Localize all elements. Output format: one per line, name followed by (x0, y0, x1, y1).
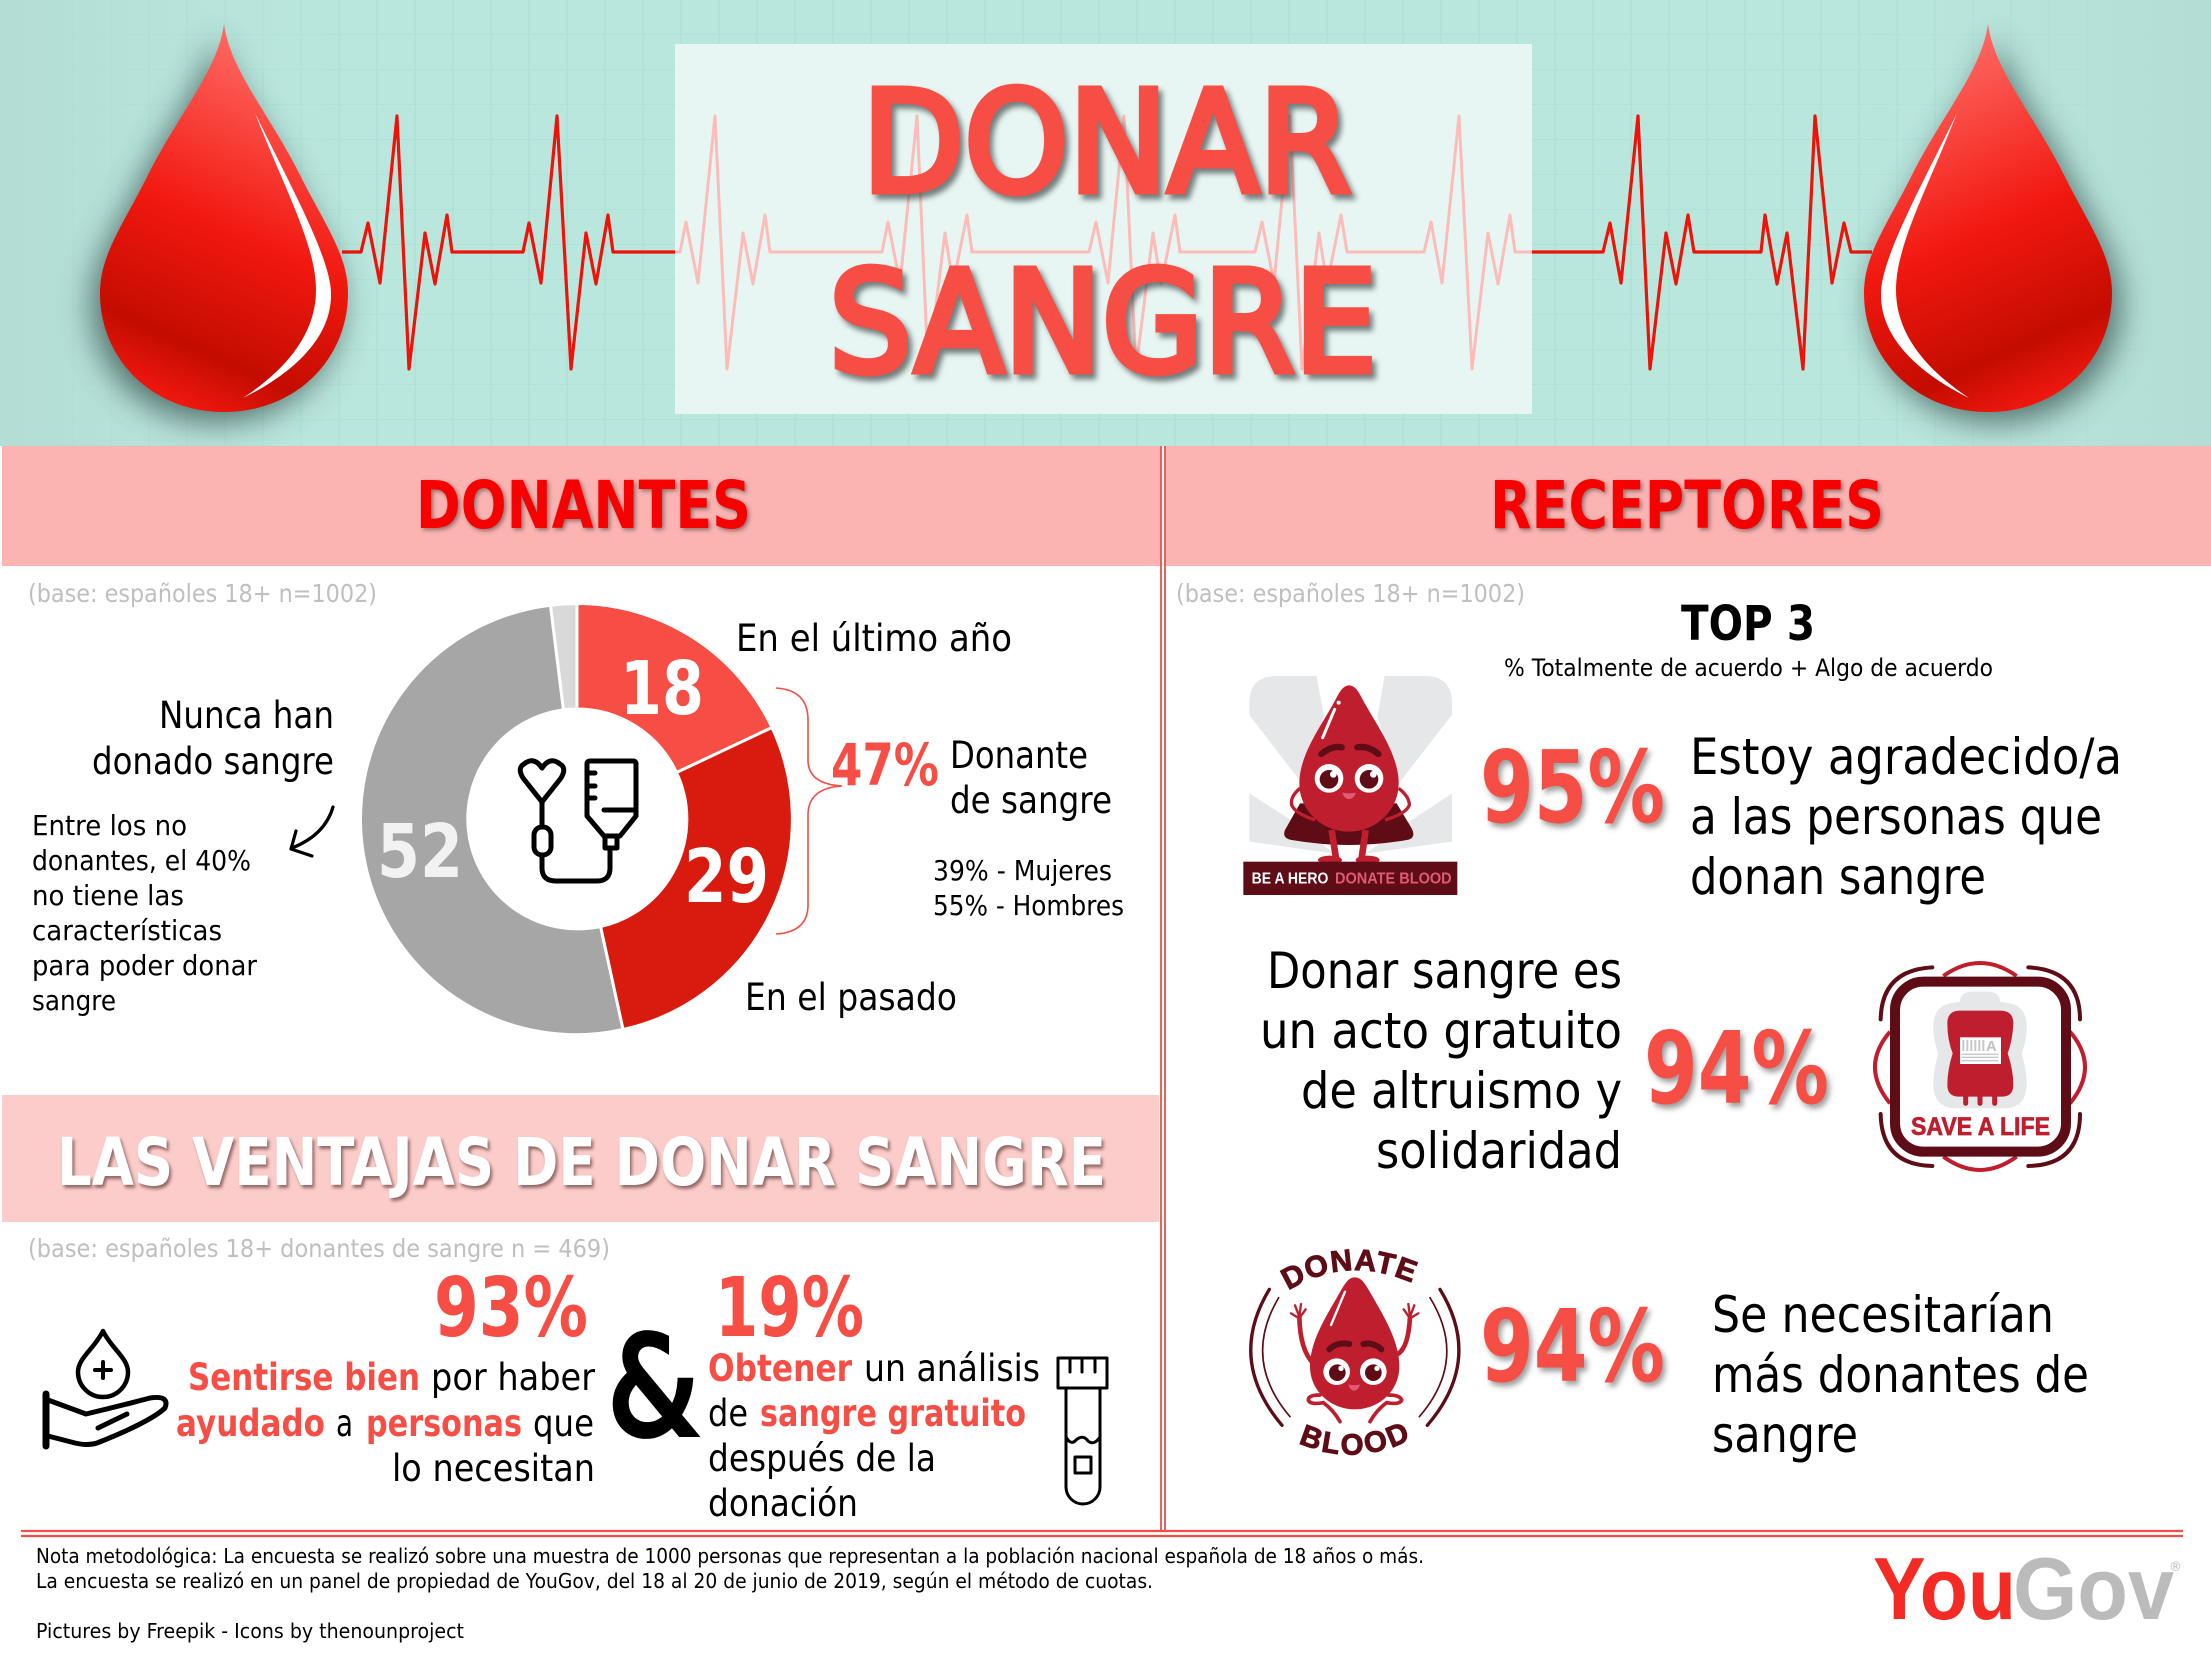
ECG line inside title box (675, 116, 1532, 369)
icon: donate blood (1249, 1249, 1461, 1456)
logo: YouGov: Gov (2013, 1539, 2174, 1638)
base note donantes: (base: españoles 18+ n=1002) (28, 579, 377, 608)
ECG line left (342, 116, 675, 369)
text: obtener analisis: un análisis (864, 1347, 1040, 1390)
section band: RECEPTORES: RECEPTORES (1490, 467, 1884, 544)
donut chart (361, 604, 792, 1035)
text: split by gender: 39% - Mujeres (933, 854, 1112, 887)
stat: 94% acto: 94% (1644, 1010, 1829, 1127)
brace (776, 688, 842, 934)
icon: donate blood: DONATE (1280, 1249, 1418, 1290)
icon: hand with drop (46, 1331, 166, 1446)
section band: DONANTES (2, 446, 1161, 566)
base note receptores: (base: españoles 18+ n=1002) (1176, 579, 1525, 608)
text: nota metodologica: Nota metodológica: La encuesta se realizó sobre una muestra de 1000 personas que representan a la población nacional española de 18 años o más. (36, 1544, 1424, 1568)
logo: YouGov: You (1873, 1539, 2016, 1638)
section band: RECEPTORES (1166, 446, 2211, 566)
text: nota metodologica (36, 1544, 1424, 1593)
icon: test tube (1058, 1358, 1107, 1504)
icon: be a hero: BE A HERO (1252, 870, 1328, 887)
text: acto gratuito: Donar sangre es (1267, 942, 1622, 1000)
text: obtener analisis (708, 1347, 1040, 1525)
icon: be a hero: DONATE BLOOD (1335, 870, 1452, 887)
title: SANGRE: SANGRE (829, 242, 1377, 405)
text: acto gratuito: un acto gratuito (1260, 1002, 1622, 1060)
ampersand: & (608, 1309, 698, 1467)
text: split by gender (933, 854, 1124, 922)
text: no donantes note (32, 809, 257, 1017)
icon: heart and blood bag (520, 761, 636, 881)
text: nota metodologica: La encuesta se realizó en un panel de propiedad de YouGov, del 18 al 20 de junio de 2019, según el método de cuotas. (36, 1569, 1153, 1593)
heading: TOP 3: TOP 3 (1681, 596, 1815, 652)
text: sentirse bien: que (533, 1402, 594, 1445)
segment: 52 (361, 605, 623, 1035)
logo: YouGov: ® (2169, 1560, 2182, 1575)
callout: 47% donante de sangre: 47% (831, 731, 939, 799)
panel: ventajas band: LAS VENTAJAS DE DONAR SANGRE (57, 1124, 1106, 1201)
text: sentirse bien: personas (366, 1402, 522, 1445)
label: En el último año: En el último año (736, 617, 1012, 660)
label: Nunca han donado sangre: Nunca han (159, 694, 334, 737)
text: mas donantes: más donantes de (1712, 1346, 2089, 1404)
icon: blood drop right (1864, 24, 2120, 422)
callout: 47% donante de sangre: de sangre (950, 779, 1112, 822)
text: obtener analisis: sangre gratuito (760, 1392, 1026, 1435)
label: En el pasado: En el pasado (745, 976, 957, 1019)
text: no donantes note: sangre (32, 984, 116, 1017)
panel: ventajas band (2, 1095, 1159, 1222)
value 52: 52 (377, 809, 463, 895)
icon: save a life (1875, 963, 2085, 1170)
text: acto gratuito (1260, 942, 1622, 1180)
logo: YouGov (1873, 1539, 2182, 1638)
value 29: 29 (684, 834, 769, 920)
callout: 47% donante de sangre: Donante (950, 734, 1088, 777)
text: obtener analisis: Obtener (708, 1347, 853, 1390)
text: no donantes note: características (32, 914, 222, 947)
value 18: 18 (620, 646, 704, 732)
stat: 94% donantes: 94% (1480, 1288, 1665, 1405)
text: mas donantes (1712, 1286, 2089, 1464)
arrow (291, 807, 333, 856)
text: sentirse bien: lo necesitan (392, 1447, 595, 1490)
stat: 95%: 95% (1480, 729, 1665, 846)
text: no donantes note: para poder donar (32, 949, 257, 982)
stat: 19%: 19% (715, 1261, 864, 1356)
base note ventajas: (base: españoles 18+ donantes de sangre n = 469) (28, 1234, 610, 1263)
text: sentirse bien: Sentirse bien (188, 1356, 420, 1399)
text: acto gratuito: de altruismo y (1301, 1062, 1622, 1120)
text: sentirse bien (176, 1356, 596, 1490)
text: mas donantes: sangre (1712, 1406, 1858, 1464)
segment: 29 (600, 728, 792, 1030)
text: obtener analisis: de (708, 1392, 748, 1435)
title: DONAR: DONAR (862, 62, 1351, 225)
text: credits: Pictures by Freepik - Icons by thenounproject (36, 1619, 464, 1643)
text: sentirse bien: a (336, 1402, 353, 1445)
text: agradecido: Estoy agradecido/a (1690, 728, 2122, 786)
icon: save a life: A (1986, 1039, 1997, 1055)
icon: save a life: SAVE A LIFE (1911, 1114, 2050, 1141)
segment: rest (550, 604, 577, 710)
text: mas donantes: Se necesitarían (1712, 1286, 2054, 1344)
icon: be a hero (1243, 676, 1457, 895)
text: agradecido: a las personas que (1690, 788, 2102, 846)
text: obtener analisis: donación (708, 1482, 858, 1525)
section band: DONANTES: DONANTES (416, 467, 751, 544)
callout: 47% donante de sangre (831, 731, 1112, 822)
text: no donantes note: no tiene las (32, 879, 184, 912)
text: no donantes note: donantes, el 40% (32, 844, 251, 877)
icon: donate blood: BLOOD (1299, 1424, 1408, 1456)
text: sentirse bien: ayudado (176, 1402, 325, 1445)
text: split by gender: 55% - Hombres (933, 889, 1124, 922)
text: agradecido (1690, 728, 2122, 906)
subheading: % Totalmente de acuerdo + Algo de acuerdo (1504, 654, 1993, 682)
label: Nunca han donado sangre (92, 694, 334, 783)
text: acto gratuito: solidaridad (1376, 1122, 1622, 1180)
text: sentirse bien: por haber (431, 1356, 596, 1399)
segment: 18 (577, 604, 772, 772)
header banner (0, 0, 2211, 446)
icon: blood drop left (92, 24, 348, 422)
ECG line right (1532, 116, 1872, 369)
text: agradecido: donan sangre (1690, 848, 1986, 906)
text: obtener analisis: después de la (708, 1437, 936, 1480)
label: Nunca han donado sangre: donado sangre (92, 740, 334, 783)
title box (675, 44, 1532, 414)
text: no donantes note: Entre los no (32, 809, 187, 842)
stat: 93%: 93% (434, 1261, 588, 1356)
